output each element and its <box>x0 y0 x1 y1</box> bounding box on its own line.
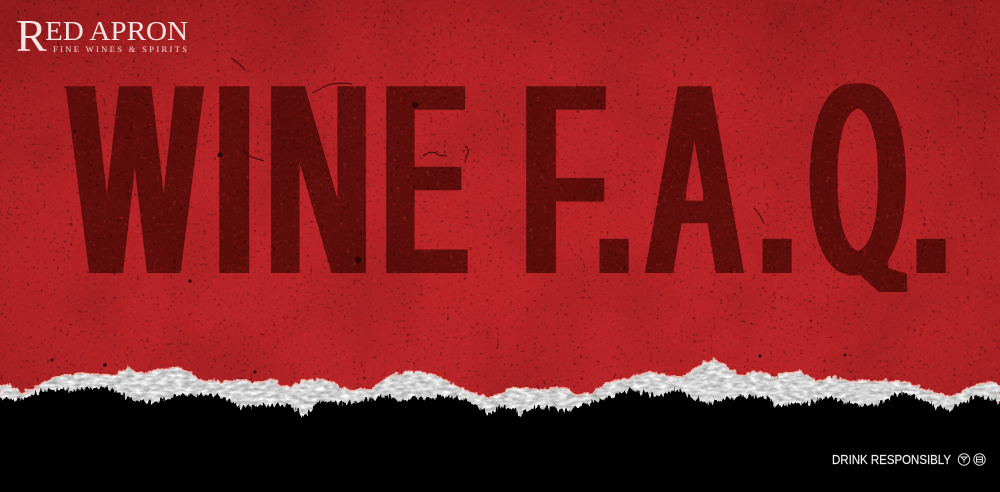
title: WINE F.A.Q.: I <box>215 21 254 337</box>
title: WINE F.A.Q.: W <box>70 21 200 337</box>
logo: Red Apron Fine Wines & Spirits: ED APRON <box>45 16 188 46</box>
title: WINE F.A.Q.: E <box>383 21 468 337</box>
logo: Red Apron Fine Wines & Spirits: FINE WINES & SPIRITS <box>53 44 187 54</box>
title: WINE F.A.Q.: . <box>912 21 950 337</box>
title: WINE F.A.Q.: A <box>645 21 744 337</box>
icon: no drinking and driving <box>958 454 970 465</box>
title: WINE F.A.Q.: . <box>595 21 633 337</box>
torn paper edge: white fibres <box>0 360 1000 442</box>
logo: Red Apron Fine Wines & Spirits: R <box>16 10 47 61</box>
torn paper edge: pink fringe <box>0 359 1000 440</box>
footer: Drink Responsibly: DRINK RESPONSIBLY <box>832 453 952 467</box>
icon: no under-age drinking <box>974 454 985 465</box>
title: WINE F.A.Q.: Q <box>810 21 906 337</box>
black lower panel <box>0 387 1000 483</box>
title: WINE F.A.Q.: . <box>758 21 796 337</box>
logo: Red Apron Fine Wines & Spirits <box>16 10 188 61</box>
title: WINE F.A.Q. <box>66 21 950 337</box>
title: WINE F.A.Q.: F <box>522 21 606 337</box>
title: WINE F.A.Q.: N <box>266 21 371 337</box>
